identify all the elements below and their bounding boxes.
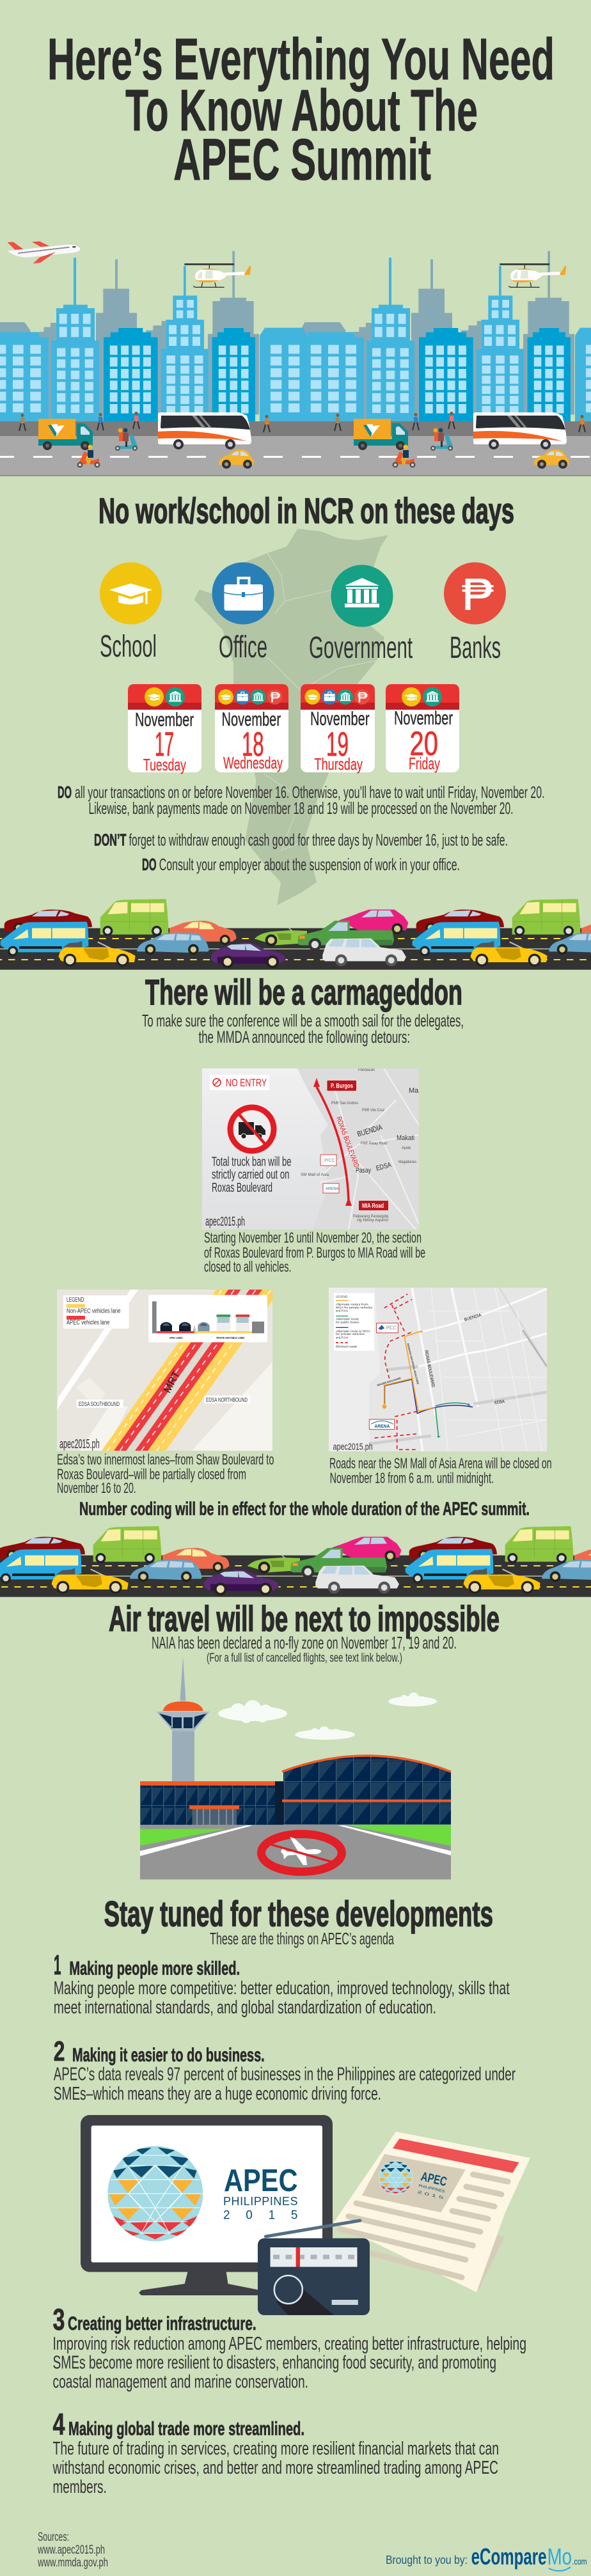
legend: for public buses (336, 1321, 359, 1324)
caption: Mall of Asia: November 18 from 6 a.m. until midnight. (330, 1469, 494, 1486)
text: agenda intro: These are the things on APEC’s agenda (210, 1929, 394, 1948)
map silhouette: Metro Manila (194, 529, 388, 905)
helicopters (184, 263, 566, 287)
map: SM Mall of Asia closures (329, 1288, 547, 1452)
lane diagram (148, 1295, 267, 1342)
legend: and PUVs (336, 1336, 348, 1339)
text: truck ban (212, 1156, 291, 1192)
map labels (77, 1369, 250, 1408)
control tower (156, 1657, 210, 1781)
markers: MIA Road (362, 1202, 384, 1210)
route line (317, 1087, 349, 1206)
sources: Sources: (38, 2531, 69, 2544)
caption: Roxas Boulevard: of Roxas Boulevard from P. Burgos to MIA Road will be (204, 1244, 425, 1261)
caption: EDSA: November 16 to 20. (57, 1479, 136, 1496)
agenda item 3: coastal management and marine conservation. (52, 2372, 308, 2393)
map labels: EDSA (375, 1161, 392, 1173)
illustration: television (81, 2115, 333, 2295)
calendar: November 19 (301, 684, 375, 774)
legend: APEC vehicles lane (67, 1320, 110, 1326)
legend: Blocked roads (336, 1345, 357, 1348)
map labels: Magallanes (398, 1160, 417, 1164)
icon: office (212, 563, 274, 624)
map labels: MRT (161, 1369, 182, 1395)
agenda item 1 (54, 1949, 510, 2018)
agenda item 3 (52, 2302, 526, 2393)
no-fly sign (261, 1834, 342, 1872)
blocked roads (375, 1294, 418, 1449)
legend: Alternate routes from (336, 1302, 368, 1306)
legend: Non-APEC vehicles lane (67, 1308, 121, 1315)
agenda item 3: Creating better infrastructure. (68, 2313, 256, 2334)
category labels (100, 630, 501, 665)
legend (63, 1295, 129, 1329)
category labels: Office (219, 630, 267, 664)
caption: Roxas Boulevard: Starting November 16 until November 20, the section (204, 1229, 422, 1245)
calendar: November 18: November (221, 709, 281, 730)
illustration: airport (140, 1657, 451, 1880)
icon: banks (444, 563, 506, 624)
lane diagram: PRIVATE AND PUBLIC LANES (216, 1336, 244, 1339)
agenda item 4 (52, 2407, 499, 2497)
legend: Alternate route (336, 1318, 359, 1321)
map labels: Mar (409, 1087, 421, 1095)
footer: eCompareMo branding: .com (572, 2556, 587, 2566)
icon: government (331, 565, 393, 627)
map labels: ROXAS BOULEVARD (335, 1116, 360, 1169)
markers: PICC (324, 1159, 335, 1163)
legend: LEGEND: (336, 1295, 348, 1299)
caption: EDSA: Edsa’s two innermost lanes–from Shaw Boulevard to (57, 1451, 274, 1468)
APEC logo text: PHILIPPINES (223, 2195, 298, 2208)
text: no-fly zone: (For a full list of cancelled flights, see text link below.) (207, 1651, 402, 1665)
map labels: PNR Vito Cruz (362, 1108, 384, 1112)
footer: eCompareMo branding: Mo (548, 2543, 572, 2570)
illustration: city street with buildings and vehicles (0, 241, 591, 476)
calendar: November 18 (215, 684, 288, 772)
calendar: November 20 (386, 684, 459, 773)
venue markers: PICC (386, 1325, 396, 1331)
calendar: November 17: November (135, 710, 194, 730)
caption: Roxas Boulevard (204, 1229, 425, 1275)
calendar: November 19: November (310, 708, 370, 730)
APEC logo text: APEC (224, 2164, 298, 2198)
map: SM Mall of Asia closures: apec2015.ph (333, 1442, 373, 1452)
map labels: BUENDIA (464, 1313, 482, 1322)
calendar: November 17: Tuesday (143, 755, 186, 774)
category icons (100, 563, 506, 627)
text block: dos and don'ts: DO (142, 855, 156, 874)
runway (140, 1825, 451, 1880)
caption: Roxas Boulevard: closed to all vehicles. (204, 1258, 292, 1275)
illustration: newspaper: PHILIPPINES (418, 2184, 445, 2194)
calendar: November 20: November (394, 708, 453, 729)
icon: school (100, 563, 162, 624)
markers (313, 1078, 388, 1210)
map labels: BUENDIA (356, 1123, 383, 1139)
map labels: SEASIDE BOULEVARD (377, 1377, 401, 1387)
calendar: November 19: Thursday (315, 754, 363, 774)
foreground buildings (0, 258, 591, 421)
agenda item 2 (54, 2036, 516, 2104)
caption: EDSA: Roxas Boulevard–will be partially closed from (57, 1466, 246, 1483)
sources (37, 2531, 108, 2570)
legend: for private vehicles (336, 1332, 365, 1336)
map labels: PNR Pasay Road (361, 1141, 387, 1146)
agenda item 4: Making global trade more streamlined. (68, 2419, 304, 2440)
illustration: radio (258, 2221, 370, 2315)
legend: MOA for private vehicles (336, 1306, 372, 1309)
calendar: November 20: 20 (409, 725, 438, 763)
text block: dos and don'ts (58, 783, 544, 874)
category labels: Government (309, 631, 413, 665)
no entry label (210, 1075, 269, 1090)
caption: Mall of Asia (329, 1455, 552, 1486)
agenda item 1: Making people more skilled. (69, 1958, 240, 1979)
illustration: traffic jam 2 (0, 1526, 591, 1597)
agenda item 2: SMEs–which means they are a huge economic driving force. (54, 2084, 381, 2104)
calendar: November 18: Wednesday (223, 753, 283, 772)
APEC globe logo (107, 2146, 203, 2242)
alternate routes (382, 1331, 473, 1437)
calendar: November 17 (128, 684, 201, 774)
map labels: SM Mall of Asia (301, 1173, 329, 1177)
map: Roxas Boulevard closure: apec2015.ph (205, 1215, 245, 1229)
markers: ARENA (326, 1187, 339, 1191)
map labels (301, 1068, 421, 1222)
icon: truck ban sign (230, 1107, 274, 1151)
agenda item 1: 1 (54, 1949, 61, 1981)
legend: LEGEND: (67, 1297, 85, 1304)
map labels: Pasay (356, 1167, 371, 1175)
illustration: traffic jam (0, 899, 591, 970)
map labels: PNR San Andres (331, 1101, 359, 1105)
map labels: Pandacan (358, 1068, 375, 1072)
agenda item 3: 3 (52, 2302, 65, 2336)
map: EDSA lanes (57, 1290, 280, 1451)
illustration: newspaper (334, 2132, 530, 2292)
footer: eCompareMo branding: eCompare (471, 2543, 547, 2570)
legend: Alternate route to MOA (336, 1329, 370, 1332)
map: Roxas Boulevard closure (202, 1068, 421, 1229)
airplane (8, 241, 81, 263)
sources: www.apec2015.ph (37, 2543, 105, 2557)
map labels (377, 1313, 505, 1405)
text block: dos and don'ts: DO (58, 783, 72, 802)
no entry label: NO ENTRY (226, 1077, 267, 1089)
title (47, 27, 555, 192)
agenda item 2: Making it easier to do business. (72, 2045, 265, 2066)
map labels: DIOSDADO MACAPAGAL BOULEVARD (406, 1343, 420, 1385)
caption: EDSA (57, 1451, 274, 1496)
APEC logo text (223, 2164, 298, 2222)
map labels: Paliparang Pandaigdig (353, 1214, 388, 1219)
text: detours intro (142, 1011, 464, 1047)
title: APEC Summit (173, 127, 431, 192)
illustration: newspaper: APEC (420, 2169, 448, 2189)
sources: www.mmda.gov.ph (37, 2556, 108, 2570)
category labels: Banks (450, 631, 501, 665)
agenda item 4: members. (52, 2477, 107, 2497)
background buildings (0, 251, 574, 421)
map labels: ROXAS BOULEVARD (423, 1350, 435, 1387)
map labels: Ayala (402, 1146, 411, 1150)
legend (334, 1293, 374, 1351)
text: truck ban: Total truck ban will be (212, 1155, 292, 1169)
text: detours intro: the MMDA announced the following detours: (198, 1027, 410, 1047)
map labels: EDSA SOUTHBOUND (79, 1401, 120, 1408)
clouds (218, 1692, 437, 1740)
text: truck ban: strictly carried out on (212, 1167, 289, 1182)
map labels: ng Ninoy Aquino (357, 1218, 388, 1222)
text: truck ban: Roxas Boulevard (212, 1181, 272, 1195)
agenda item 2: 2 (54, 2036, 65, 2067)
markers: P. Burgos (331, 1082, 353, 1089)
footer: eCompareMo branding (386, 2543, 587, 2571)
map labels: Makati (397, 1134, 414, 1142)
text: no-fly zone (152, 1633, 457, 1665)
legend: and PUVs (336, 1309, 348, 1313)
map labels: EDSA NORTHBOUND (206, 1396, 248, 1404)
calendar: November 19: 19 (326, 726, 349, 763)
road (0, 421, 591, 476)
venue markers: ARENA (374, 1423, 390, 1429)
terminal building (140, 1755, 451, 1825)
illustration: newspaper: 2 0 1 5 (417, 2190, 445, 2201)
text block: dos and don'ts: DON’T (94, 831, 126, 850)
calendar: November 18: 18 (242, 726, 264, 763)
calendar: November 17: 17 (155, 726, 174, 763)
lane diagram: APEC LANES (169, 1336, 183, 1339)
venue markers (369, 1323, 398, 1430)
category labels: School (100, 630, 157, 664)
APEC logo text: 2 0 1 5 (223, 2208, 298, 2222)
agenda item 4: 4 (52, 2407, 65, 2441)
street vehicles and pedestrians (19, 412, 585, 469)
calendar: November 20: Friday (409, 754, 440, 773)
map: EDSA lanes: apec2015.ph (59, 1437, 100, 1451)
map labels: EDSA (494, 1400, 505, 1405)
footer: eCompareMo branding: Brought to you by: (386, 2554, 468, 2566)
